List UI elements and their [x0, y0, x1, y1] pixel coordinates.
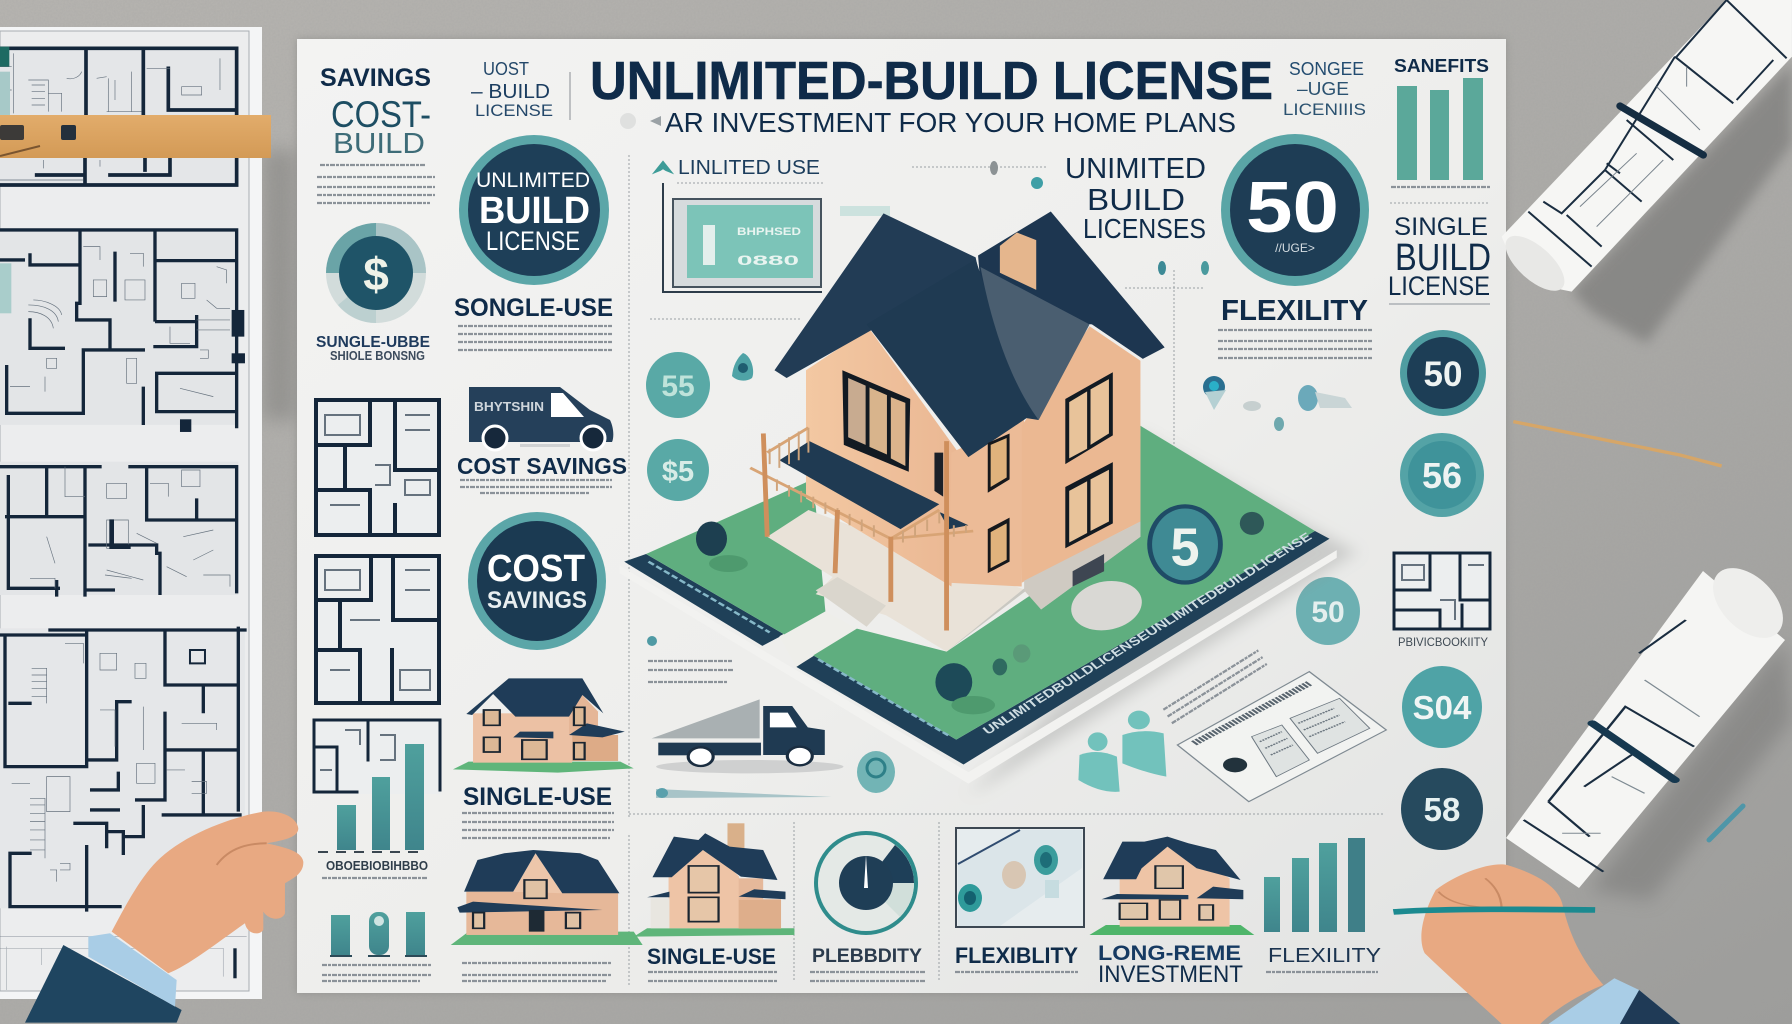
- bushes: [696, 512, 1264, 714]
- single-use caption: [316, 334, 430, 363]
- floor plan 1: [0, 47, 237, 185]
- right column stat circles: 50: [1424, 355, 1462, 394]
- coin on lawn: 5: [1170, 517, 1200, 577]
- cost build license label: – BUILD: [471, 81, 550, 103]
- cost savings badge: SAVINGS: [487, 587, 587, 614]
- small house 3: [634, 823, 794, 937]
- single build license label: SINGLE: [1394, 213, 1488, 241]
- map panel: [956, 828, 1084, 927]
- poster floor plan C with bars: [314, 720, 441, 878]
- porch slab: [767, 510, 1027, 652]
- small decorative markers: [990, 161, 1352, 431]
- savings cost-build block: BUILD: [333, 128, 425, 160]
- coin icon: $: [363, 248, 389, 300]
- windows: [842, 370, 910, 472]
- cost savings badge: [468, 512, 606, 650]
- delivery van icon: [469, 387, 613, 450]
- back roofs: [774, 211, 1165, 378]
- right plan thumbnail: PBIVICBOOKIITY: [1398, 635, 1488, 649]
- base plate: [619, 426, 1337, 784]
- floor plan 4: [0, 570, 245, 910]
- poster floor plan A: [314, 398, 441, 537]
- base plate: UNLIMITEDBUILDLICENSEUNLIMITEDBUILDLICENSE: [980, 530, 1315, 737]
- single-use caption: SUNGLE-UBBE: [316, 334, 430, 351]
- single-use license top label: –UGE: [1297, 79, 1349, 99]
- songle-use text block: SONGLE-USE: [454, 294, 613, 322]
- single-use label 1: SINGLE-USE: [463, 783, 612, 811]
- 58 navy circle: 58: [1424, 791, 1460, 828]
- license board illustration: [663, 183, 822, 292]
- small house 4: [1089, 837, 1254, 935]
- flatbed truck icon: [652, 699, 844, 773]
- teal stat circles left: 55: [661, 370, 695, 403]
- lower-right blueprint roll: [1506, 555, 1792, 900]
- chimney: [1000, 233, 1036, 290]
- poster floor plan B: [314, 554, 441, 705]
- 504 circle: S04: [1413, 689, 1472, 726]
- flexility label bottom: [1266, 945, 1381, 972]
- single build license label: BUILD: [1395, 237, 1491, 279]
- unlimited build licenses label: [1065, 153, 1206, 244]
- lower three bars: [322, 912, 432, 981]
- unlimited build licenses label: BUILD: [1087, 182, 1185, 217]
- floor plan 2: [0, 228, 245, 432]
- license board illustration: BHPHSED: [737, 226, 801, 238]
- right plan thumbnail: [1392, 551, 1492, 649]
- unlimited use label: LINLITED USE: [678, 157, 820, 179]
- savings cost-build block: COST-: [331, 94, 431, 135]
- cost build license label: [471, 59, 570, 120]
- walls: [806, 328, 961, 587]
- 50 badge: 50: [1246, 168, 1339, 248]
- 50 light circle: [1296, 577, 1360, 645]
- long-term investment label: LONG-REME: [1098, 942, 1241, 965]
- poster floor plan C with bars: OBOEBIOBIHBBO: [326, 858, 428, 873]
- savings cost-build block: [317, 64, 435, 203]
- flexility text block: FLEXILITY: [1221, 295, 1368, 327]
- title: UNLIMITED-BUILD LICENSE: [590, 51, 1273, 111]
- wooden clamp bar: [0, 115, 271, 158]
- single-use license top label: LICENIIIS: [1283, 100, 1366, 119]
- single-use label 2: [647, 944, 778, 981]
- stone oval: [1061, 572, 1152, 639]
- subtitle: AR INVESTMENT FOR YOUR HOME PLANS: [665, 107, 1236, 138]
- license board illustration: 0880: [737, 252, 799, 268]
- gauge icon: [814, 831, 918, 935]
- delivery van icon: BHYTSHIN: [474, 399, 544, 414]
- certificate document: [1177, 672, 1386, 802]
- single-use caption: SHIOLE BONSNG: [330, 348, 425, 363]
- teal people icons: [1078, 711, 1166, 792]
- wooden pencil: [1513, 422, 1722, 466]
- plebbdity label: PLEBBDITY: [812, 946, 922, 967]
- flexibility label: FLEXIBLITY: [955, 943, 1078, 968]
- savings cost-build block: SAVINGS: [320, 64, 431, 92]
- caption lines near truck: [647, 636, 734, 682]
- single build license label: [1388, 213, 1491, 304]
- 504 circle: [1402, 666, 1482, 748]
- left hand with sleeve: [25, 811, 303, 1023]
- benefits bar chart: SANEFITS: [1394, 56, 1489, 76]
- 50 badge: //UGE>: [1275, 241, 1315, 255]
- isometric house illustration: [619, 211, 1356, 797]
- 50 light circle: 50: [1311, 596, 1345, 629]
- small text on diagonal: [1163, 650, 1267, 723]
- right column stat circles: 56: [1422, 455, 1462, 496]
- songle-use text block: [454, 294, 613, 350]
- unlimited build licenses label: LICENSES: [1083, 213, 1206, 244]
- flexility label bottom: FLEXILITY: [1268, 945, 1381, 967]
- single-use license top label: [1283, 59, 1366, 119]
- cost savings label: [457, 453, 627, 493]
- balcony: [750, 428, 973, 631]
- single-use label 2: SINGLE-USE: [647, 944, 776, 969]
- long-term investment label: INVESTMENT: [1098, 961, 1243, 988]
- unlimited build license badge: LICENSE: [486, 226, 580, 256]
- unlimited build license badge: [459, 135, 609, 285]
- cost savings badge: COST: [487, 548, 585, 590]
- single-use license top label: SONGEE: [1289, 59, 1364, 79]
- small house 1: [453, 678, 634, 773]
- 50 badge: [1221, 134, 1369, 286]
- small teal badge icon: [732, 353, 753, 381]
- teal spiral icon: [857, 751, 895, 793]
- left floor plan sheet: [0, 27, 271, 999]
- top-right blueprint roll: [1497, 0, 1792, 343]
- flexility text block: [1218, 295, 1372, 358]
- 58 navy circle: [1401, 768, 1483, 850]
- floor plan 3: [0, 462, 238, 595]
- cost savings label: COST SAVINGS: [457, 453, 627, 479]
- unlimited use label: [655, 157, 890, 216]
- lower text block under house 2: [462, 963, 612, 981]
- coin on lawn: [1147, 504, 1223, 585]
- growth bar chart: [1264, 838, 1365, 932]
- main poster: [297, 39, 1506, 993]
- coin icon: [326, 223, 426, 323]
- single build license label: LICENSE: [1388, 271, 1490, 301]
- blue pen on table: [1709, 806, 1743, 840]
- cost build license label: UOST: [483, 59, 529, 79]
- unlimited build license badge: BUILD: [479, 190, 590, 232]
- teal stat circles left: $5: [662, 456, 694, 488]
- long-term investment label: [1098, 942, 1243, 988]
- single-use label 1: [462, 783, 614, 838]
- front roof: [867, 259, 1090, 457]
- cost build license label: LICENSE: [475, 101, 553, 120]
- floor plan 5 faint: [0, 937, 247, 990]
- right column stat circles: [1400, 330, 1486, 517]
- unlimited build license badge: UNLIMITED: [476, 169, 590, 192]
- right hand with pen: [1393, 864, 1680, 1024]
- plebbdity label: [810, 946, 925, 981]
- small house 2: [451, 850, 643, 945]
- teal stat circles left: [646, 352, 710, 501]
- section dividers: [629, 155, 1383, 985]
- unlimited build licenses label: UNIMITED: [1065, 153, 1206, 185]
- benefits bar chart: [1390, 56, 1490, 203]
- brush stroke: [656, 788, 832, 798]
